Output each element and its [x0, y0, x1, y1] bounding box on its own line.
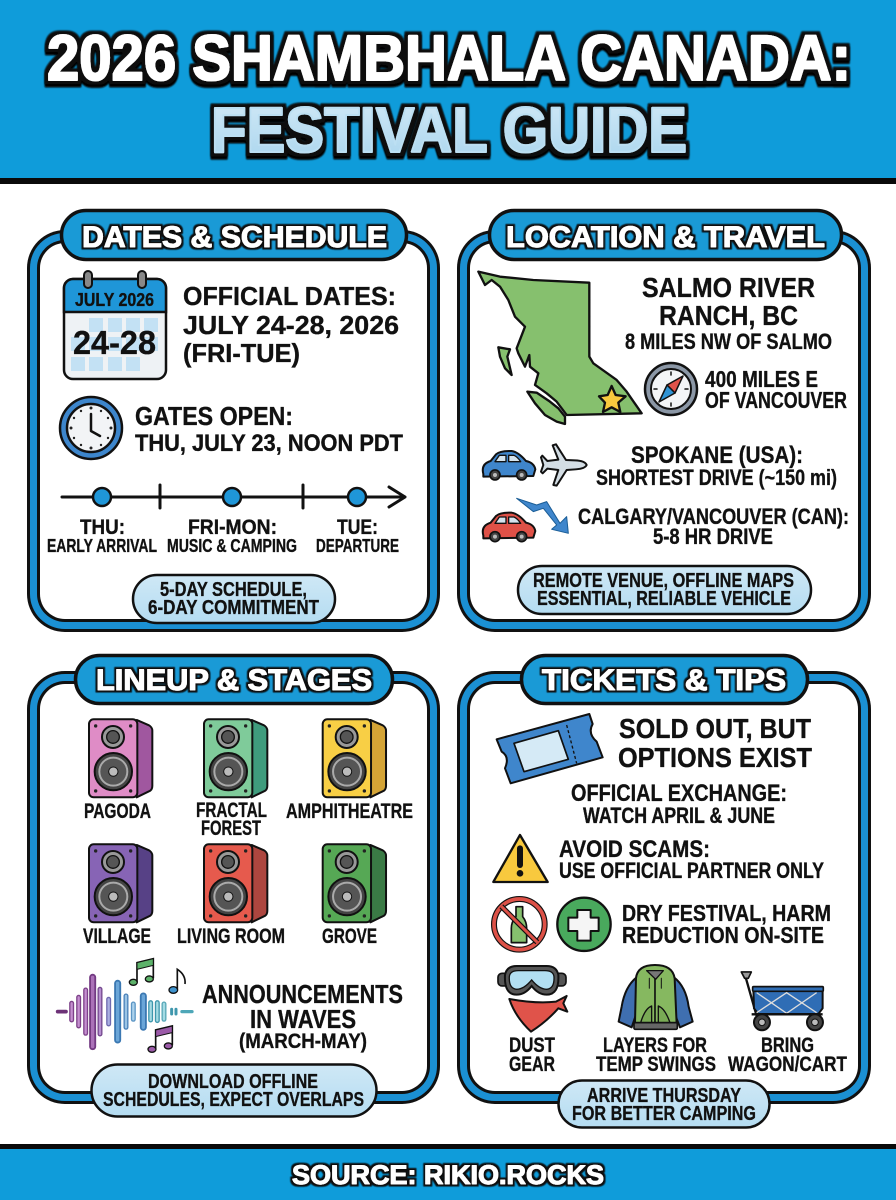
text: official exchange: WATCH APRIL & JUNE — [583, 803, 775, 828]
text: announcements: (MARCH-MAY) — [239, 1030, 367, 1053]
label: village: VILLAGE — [83, 925, 151, 948]
text: avoid scams: USE OFFICIAL PARTNER ONLY — [559, 858, 824, 883]
heading: lineup and stages: LINEUP & STAGES — [96, 664, 372, 697]
heading: lineup and stages — [76, 656, 392, 704]
icon: warning triangle — [493, 835, 548, 882]
speaker: pagoda — [89, 719, 152, 797]
text: canadian routes: 5-8 HR DRIVE — [653, 524, 773, 549]
text: dry festival: REDUCTION ON-SITE — [622, 922, 824, 948]
text: dry festival — [622, 900, 831, 948]
text: spokane route: SPOKANE (USA): — [631, 442, 803, 469]
callout: schedule commitment: 5-DAY SCHEDULE, — [160, 578, 307, 601]
callout: remote venue: ESSENTIAL, RELIABLE VEHICLE — [537, 587, 791, 610]
text: official dates: JULY 24-28, 2026 — [183, 310, 399, 340]
speaker: fractal forest — [204, 719, 267, 797]
text: sold out: OPTIONS EXIST — [618, 742, 812, 773]
icon: jacket — [619, 965, 693, 1029]
panel: tickets and tips — [457, 656, 871, 1128]
speaker: village — [89, 844, 152, 922]
panel: dates and schedule — [27, 210, 440, 632]
label: grove: GROVE — [322, 925, 377, 948]
label: layers: TEMP SWINGS — [596, 1053, 716, 1076]
text: avoid scams: AVOID SCAMS: — [559, 836, 710, 863]
callout: schedule commitment: 6-DAY COMMITMENT — [148, 596, 319, 619]
text: official exchange — [571, 780, 787, 828]
heading: dates and schedule — [62, 210, 406, 260]
text: spokane route: SHORTEST DRIVE (~150 mi) — [596, 465, 837, 490]
icon: blue car — [483, 451, 535, 480]
music note: purple — [148, 1026, 172, 1052]
text: announcements — [202, 979, 403, 1053]
label: dust gear: DUST — [509, 1034, 555, 1057]
text: venue name: 8 MILES NW OF SALMO — [625, 329, 832, 354]
label: wagon: BRING — [761, 1034, 814, 1057]
icon: no alcohol — [494, 899, 545, 950]
label: living room: LIVING ROOM — [177, 925, 285, 948]
timeline label: tuesday: TUE: — [337, 516, 378, 539]
label: amphitheatre: AMPHITHEATRE — [286, 800, 413, 823]
text: distance from vancouver — [705, 366, 847, 413]
header banner — [0, 0, 896, 184]
icon: clock — [60, 397, 122, 459]
footer — [0, 1144, 896, 1200]
icon: sound wave and music notes — [58, 959, 192, 1052]
label: wagon: WAGON/CART — [728, 1053, 847, 1076]
icon: harm reduction cross — [557, 898, 611, 951]
icon: ticket — [497, 714, 603, 783]
text: venue name — [625, 272, 832, 354]
label: fractal forest: FOREST — [201, 817, 261, 840]
speaker: grove — [323, 844, 386, 922]
icon: calendar: 24-28 — [73, 324, 156, 361]
label: fractal forest: FRACTAL — [196, 799, 267, 822]
heading: location and travel: LOCATION & TRAVEL — [506, 221, 825, 254]
text: canadian routes — [578, 504, 849, 549]
text: sold out: SOLD OUT, BUT — [619, 713, 811, 744]
callout: offline schedules: DOWNLOAD OFFLINE — [148, 1070, 318, 1093]
music note: green — [129, 959, 153, 985]
timeline label: thursday: THU: — [80, 516, 125, 539]
label: layers: LAYERS FOR — [603, 1034, 707, 1057]
callout: arrive thursday — [558, 1080, 770, 1128]
text: spokane route — [596, 442, 837, 490]
callout: remote venue: REMOTE VENUE, OFFLINE MAPS — [533, 569, 794, 592]
label: pagoda: PAGODA — [84, 800, 151, 823]
text: sold out — [618, 713, 812, 773]
speaker: amphitheatre — [323, 719, 386, 797]
timeline label: tuesday — [316, 516, 399, 556]
callout: arrive thursday: FOR BETTER CAMPING — [572, 1102, 756, 1125]
icon: british columbia map — [478, 272, 642, 424]
timeline label: thursday: EARLY ARRIVAL — [47, 536, 157, 556]
icon: winding road arrow — [517, 498, 568, 533]
timeline label: friday to monday: MUSIC & CAMPING — [167, 536, 297, 556]
text: distance from vancouver: 400 MILES E — [705, 366, 818, 392]
callout: arrive thursday: ARRIVE THURSDAY — [587, 1084, 741, 1107]
callout: offline schedules — [92, 1064, 376, 1116]
text: distance from vancouver: OF VANCOUVER — [705, 387, 847, 413]
heading: dates and schedule: DATES & SCHEDULE — [82, 221, 387, 254]
text: dry festival: DRY FESTIVAL, HARM — [622, 900, 831, 926]
text: announcements: IN WAVES — [250, 1004, 356, 1034]
heading: tickets and tips — [522, 656, 808, 704]
callout: schedule commitment — [133, 575, 335, 623]
title line 2: FESTIVAL GUIDE — [211, 94, 687, 166]
icon: calendar: JULY 2026 — [75, 290, 154, 310]
heading: location and travel — [490, 210, 842, 260]
timeline — [47, 485, 405, 556]
icon: calendar — [64, 271, 166, 379]
icon: compass — [645, 363, 697, 415]
text: gates open — [135, 401, 403, 457]
heading: tickets and tips: TICKETS & TIPS — [542, 664, 786, 697]
label: dust gear: GEAR — [509, 1053, 555, 1076]
timeline label: tuesday: DEPARTURE — [316, 536, 399, 556]
text: venue name: RANCH, BC — [659, 300, 798, 331]
text: official dates — [183, 281, 399, 368]
panel: location and travel — [457, 210, 871, 632]
text: avoid scams — [559, 836, 824, 883]
label: fractal forest — [196, 799, 267, 840]
icon: airplane — [541, 444, 587, 486]
text: announcements: ANNOUNCEMENTS — [202, 979, 403, 1009]
timeline label: friday to monday: FRI-MON: — [188, 516, 277, 539]
timeline label: thursday — [47, 516, 157, 556]
icon: wagon — [741, 972, 823, 1030]
speaker: living room — [204, 844, 267, 922]
callout: offline schedules: SCHEDULES, EXPECT OVERLAPS — [103, 1088, 364, 1111]
timeline label: friday to monday — [167, 516, 297, 556]
icon: red car — [483, 513, 535, 542]
icon: goggles and bandana — [498, 966, 567, 1032]
text: official dates: OFFICIAL DATES: — [183, 281, 396, 311]
music note: blue — [169, 969, 185, 993]
source text: SOURCE: RIKIO.ROCKS — [292, 1160, 604, 1190]
text: official exchange: OFFICIAL EXCHANGE: — [571, 780, 787, 807]
label: dust gear — [509, 1034, 555, 1076]
text: venue name: SALMO RIVER — [642, 272, 815, 303]
text: official dates: (FRI-TUE) — [183, 338, 300, 368]
panel: lineup and stages — [27, 656, 440, 1116]
label: wagon — [728, 1034, 847, 1076]
callout: remote venue — [518, 566, 811, 614]
text: gates open: GATES OPEN: — [135, 401, 293, 431]
text: gates open: THU, JULY 23, NOON PDT — [135, 430, 403, 457]
label: layers — [596, 1034, 716, 1076]
